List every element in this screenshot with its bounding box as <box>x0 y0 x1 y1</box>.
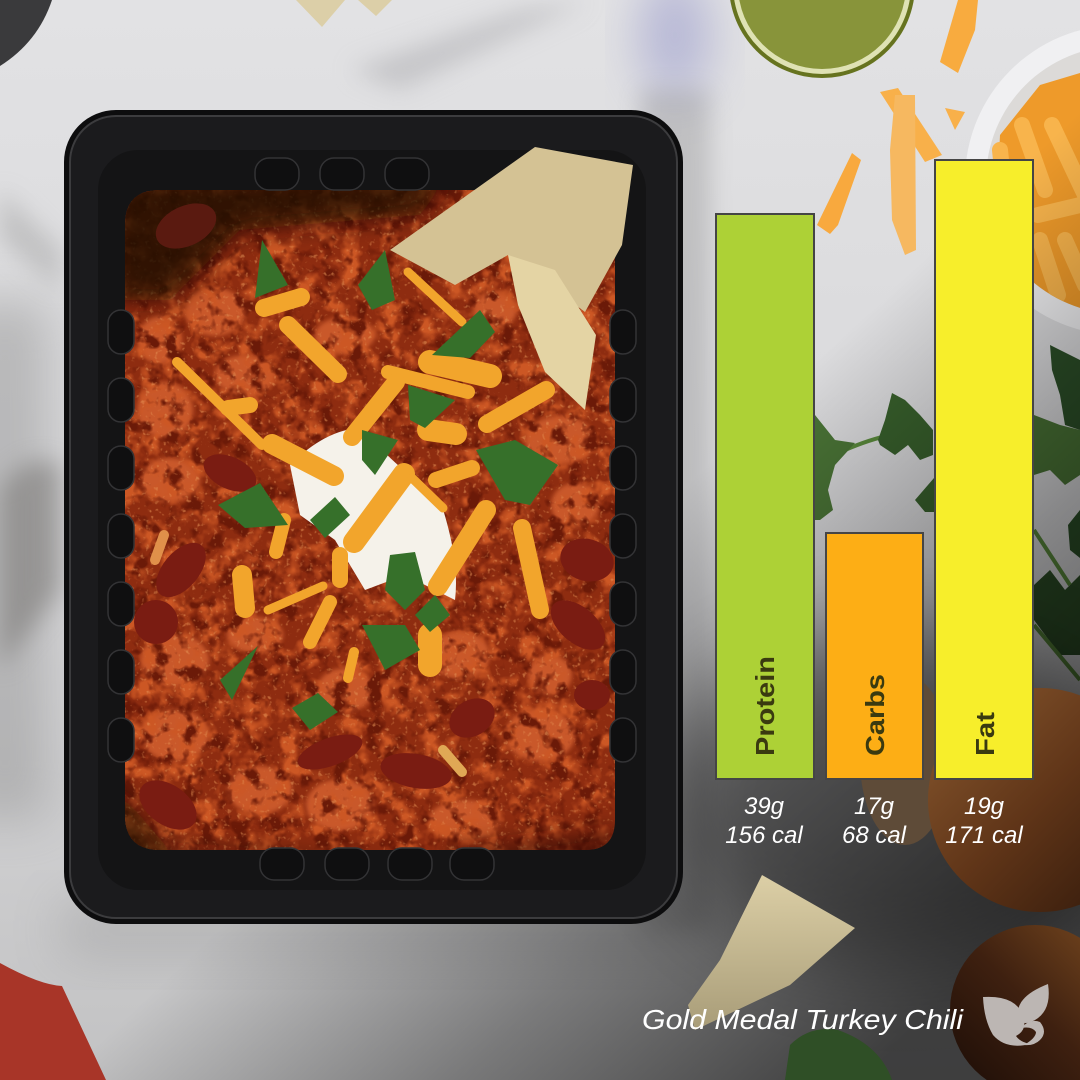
shredded cheddar on chili <box>155 272 546 772</box>
fat values: 171 cal <box>945 822 1023 849</box>
carbs values: 17g <box>854 793 894 820</box>
carbs values: 68 cal <box>842 822 907 849</box>
turkey chunks <box>137 288 599 840</box>
fat values: 19g <box>964 793 1004 820</box>
bar: carbs: Carbs <box>860 674 890 756</box>
cilantro leaves <box>218 240 558 730</box>
bar: carbs <box>826 533 923 779</box>
pepper mills <box>860 675 1080 1080</box>
cilantro at bottom <box>785 1029 892 1080</box>
scalloped tray rim <box>108 158 636 880</box>
bar: protein: Protein <box>750 656 780 756</box>
tortilla chips at top <box>296 0 392 27</box>
bowl of shredded cheese <box>965 25 1080 340</box>
bar: protein <box>716 214 814 779</box>
bar: fat <box>935 160 1033 779</box>
tortilla chip on counter <box>688 875 855 1030</box>
red cloth napkin <box>0 963 106 1080</box>
cilantro sprigs at right <box>815 345 1080 680</box>
bar chart: macros <box>716 160 1033 779</box>
bar: fat: Fat <box>970 712 1000 756</box>
tortilla chips in chili <box>390 147 633 410</box>
lime half <box>729 0 915 78</box>
protein values: 156 cal <box>725 822 803 849</box>
shredded cheese on counter <box>817 0 978 255</box>
chili food <box>110 175 620 870</box>
meal title: Gold Medal Turkey Chili <box>642 1004 964 1035</box>
dark shadow along top and bottom <box>110 175 620 870</box>
kidney beans <box>130 194 619 840</box>
meal tray <box>64 110 683 924</box>
sour cream <box>290 428 456 600</box>
protein values: 39g <box>744 793 784 820</box>
spoon at top left <box>0 0 52 66</box>
icon: leaf logo <box>983 984 1049 1046</box>
